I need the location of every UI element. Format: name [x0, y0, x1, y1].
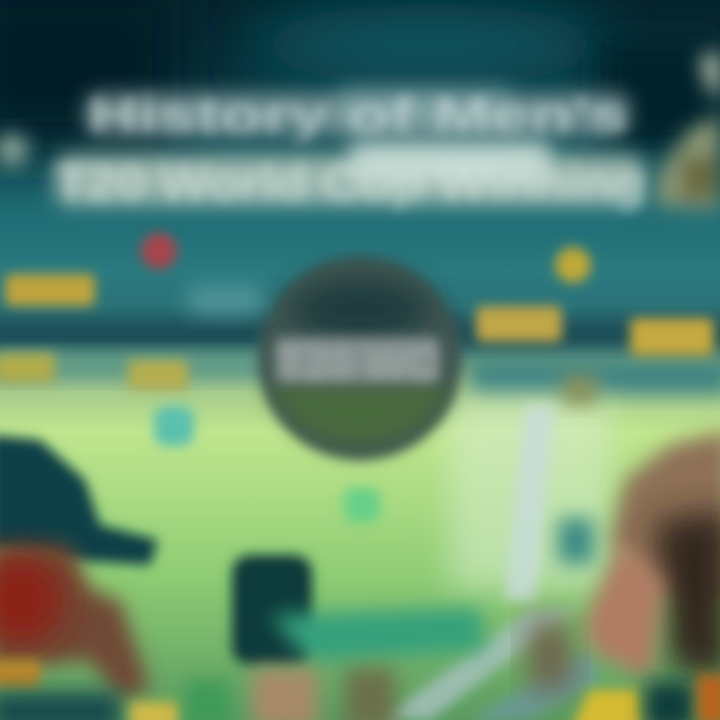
foreground: spectator with phone, centre — [185, 555, 485, 720]
foreground: net posts — [380, 405, 600, 720]
trophy in the top right corner — [655, 50, 720, 210]
foreground: spectator, right — [530, 430, 720, 720]
title — [0, 85, 645, 211]
label: yellow lower left — [0, 353, 55, 383]
title: T20 World Cup Winning — [55, 155, 645, 211]
label: yellow right — [630, 318, 714, 356]
label: olive right — [563, 376, 597, 404]
marker: yellow — [555, 247, 591, 283]
title: History of Men's — [88, 87, 628, 143]
label: teal left — [188, 285, 262, 315]
badge label: T20 WC — [278, 339, 438, 388]
marker: green — [344, 488, 380, 522]
label: yellow centre right — [476, 306, 562, 342]
marker: teal — [154, 406, 194, 446]
marker: red — [141, 233, 177, 269]
central badge — [258, 256, 462, 460]
label: yellow top left — [5, 274, 95, 306]
label: yellow lower centre left — [128, 360, 188, 390]
foreground: spectator in cap, left — [0, 435, 180, 720]
